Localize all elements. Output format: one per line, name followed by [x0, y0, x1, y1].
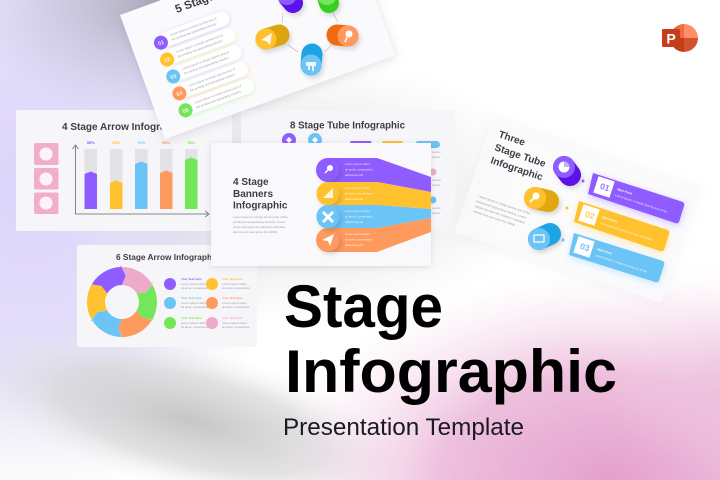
right side notes: Ipsum	[432, 183, 441, 187]
legend: six stages: Your Text Here	[222, 296, 243, 300]
legend: six stages: Lorem ipsum dolor	[222, 321, 247, 325]
banner: blue: Lorem ipsum dolor	[345, 209, 370, 213]
banner: purple: sit amet, consectetur	[345, 168, 373, 172]
banner: yellow	[316, 182, 431, 209]
heading: 6 stage arrow: 6 Stage Arrow Infographic	[116, 252, 219, 262]
bar 01	[588, 173, 684, 223]
bar chart	[84, 140, 198, 209]
numbered list: 03	[170, 74, 177, 81]
numbered list: 05	[182, 107, 190, 115]
heading: three stage tube	[489, 129, 547, 183]
banner: blue	[316, 205, 431, 228]
right side notes	[430, 150, 441, 215]
numbered list: the printing and typesetting industry	[171, 22, 217, 42]
bar chart: 56%	[162, 140, 171, 145]
heading: 4 stage arrow: 4 Stage Arrow Infographic	[62, 122, 187, 133]
body copy: dummy text ever since the 1500s	[473, 209, 516, 227]
bar 02: Main Point	[602, 215, 617, 224]
panel: 4 stage arrow slide	[16, 110, 232, 231]
banner: yellow: sit amet, consectetur	[345, 192, 373, 196]
panel: 8 stage tube slide	[241, 110, 455, 230]
panel: three stage tube slide	[455, 116, 700, 302]
tube icons row	[282, 133, 322, 147]
numbered list: Lorem Ipsum is simply dummy text of	[169, 16, 217, 37]
legend: six stages: sit amet, consectetur	[222, 325, 250, 329]
heading: 4 stage banners: Infographic	[233, 200, 288, 212]
right side notes: Ipsum	[432, 155, 441, 159]
numbered list: Lorem Ipsum is simply dummy text of	[188, 67, 236, 88]
panel: 5 stage tube slide	[120, 0, 395, 139]
heading: three stage tube: Stage Tube	[493, 142, 547, 170]
bar 03: Main Point	[597, 247, 612, 256]
banner: purple: Lorem ipsum dolor	[345, 162, 370, 166]
banner: orange	[316, 218, 431, 252]
tube: yellow	[524, 187, 548, 209]
heading: 4 stage banners: Banners	[233, 189, 273, 200]
heading: 8 stage tube: 8 Stage Tube Infographic	[290, 120, 406, 132]
legend: six stages: sit amet, consectetur	[181, 286, 209, 290]
body copy	[233, 215, 288, 234]
numbered list: 02	[164, 57, 171, 64]
body copy: Ipsum has been the industry's standard	[475, 204, 526, 225]
legend: six stages: Lorem ipsum dolor	[181, 282, 206, 286]
body copy	[473, 194, 531, 227]
bar chart: 35%	[112, 140, 121, 145]
chart axes	[72, 145, 209, 217]
circular arrow ring	[76, 257, 168, 347]
body copy: Lorem Ipsum is simply dummy text of the	[233, 215, 288, 219]
tube: yellow	[256, 28, 279, 50]
legend: six stages: sit amet, consectetur	[222, 286, 250, 290]
connector dots	[562, 180, 584, 242]
bar 01: Main Point	[617, 187, 632, 196]
tube: purple	[277, 0, 297, 5]
icon: PowerPoint logo	[662, 24, 698, 52]
heading: 4 stage banners	[233, 177, 288, 212]
legend: six stages: Your Text Here	[181, 316, 202, 320]
banner: yellow: adipiscing elit	[345, 197, 363, 201]
icon: PowerPoint logo: P	[666, 30, 676, 46]
bar 03	[569, 233, 664, 282]
body copy: printing and typesetting industry. Lorem	[476, 199, 527, 220]
bar 03: Lorem Ipsum is simply dummy text of the	[595, 253, 648, 274]
banner: orange: adipiscing elit	[345, 243, 363, 247]
numbered list: 01	[157, 40, 165, 47]
bar 02: 02	[584, 209, 596, 221]
bar chart: 55%	[87, 140, 95, 145]
legend: six stages: sit amet, consectetur	[222, 305, 250, 309]
body copy: dummy text ever since the 1500s	[233, 230, 278, 234]
legend: six stages: Lorem ipsum dolor	[181, 321, 206, 325]
legend: six stages: Lorem ipsum dolor	[181, 301, 206, 305]
legend: six stages: sit amet, consectetur	[181, 305, 209, 309]
numbered list: the printing and typesetting industry	[177, 39, 223, 59]
legend: six stages	[164, 277, 250, 329]
connector lines	[282, 13, 338, 52]
right side notes: Lorem	[432, 206, 441, 210]
numbered list: Lorem Ipsum is simply dummy text of	[182, 50, 230, 71]
legend: six stages: Your Text Here	[222, 277, 243, 281]
tube: blue	[528, 228, 550, 250]
numbered list: the printing and typesetting industry	[189, 72, 236, 92]
body copy: Ipsum has been the industry's standard	[233, 225, 286, 229]
bar 03: 03	[579, 241, 591, 253]
bar 02: Lorem Ipsum is simply dummy text of the	[600, 221, 653, 242]
banner: yellow: Lorem ipsum dolor	[345, 186, 370, 190]
legend: six stages: Your Text Here	[222, 316, 243, 320]
numbered list: 04	[176, 90, 185, 98]
legend: six stages: sit amet, consectetur	[181, 325, 209, 329]
numbered list: the printing and typesetting industry	[183, 55, 230, 76]
bar chart: 78%	[187, 140, 196, 145]
tube: purple	[553, 156, 575, 178]
banner: blue: sit amet, consectetur	[345, 214, 373, 218]
right side notes: Lorem	[432, 178, 441, 182]
panel: 4 stage banners slide	[211, 143, 431, 266]
legend: six stages: Lorem ipsum dolor	[222, 301, 247, 305]
tube: orange	[337, 26, 358, 46]
right side notes: Lorem	[432, 150, 441, 154]
heading: three stage tube: Infographic	[489, 155, 545, 183]
heading: three stage tube: Three	[497, 129, 527, 149]
title: Infographic	[285, 338, 617, 405]
banner: orange: Lorem ipsum dolor	[345, 232, 370, 236]
tube: blue	[300, 54, 322, 76]
pink icon tiles	[34, 143, 58, 214]
legend: six stages: Your Text Here	[181, 277, 202, 281]
legend: six stages: Lorem ipsum dolor	[222, 282, 247, 286]
right side notes: Ipsum	[432, 211, 441, 215]
bar 01: Lorem Ipsum is simply dummy text of the	[615, 193, 668, 214]
banner: orange: sit amet, consectetur	[345, 238, 373, 242]
body copy: Lorem Ipsum is simply dummy text of the	[478, 194, 531, 216]
bar 02	[574, 201, 669, 251]
numbered list: the printing and typesetting industry	[196, 89, 242, 109]
heading: 4 stage banners: 4 Stage	[233, 177, 269, 188]
title	[284, 273, 617, 405]
banner: blue: adipiscing elit	[345, 220, 363, 224]
tube: green	[317, 0, 337, 5]
top pills row	[350, 141, 440, 149]
title: Stage	[284, 273, 443, 340]
legend: six stages: Your Text Here	[181, 296, 202, 300]
banner: purple: adipiscing elit	[345, 173, 363, 177]
bar chart: 72%	[137, 140, 146, 145]
banner: purple	[316, 158, 431, 192]
subtitle: Presentation Template	[283, 414, 524, 441]
numbered list	[151, 9, 257, 119]
numbered list: Lorem Ipsum is simply dummy text of	[175, 33, 223, 54]
body copy: printing and typesetting industry. Lorem	[233, 220, 286, 224]
bar 01: 01	[599, 181, 611, 193]
panel: 6 stage arrow slide	[76, 245, 257, 347]
numbered list: Lorem Ipsum is simply dummy text of	[194, 84, 242, 105]
